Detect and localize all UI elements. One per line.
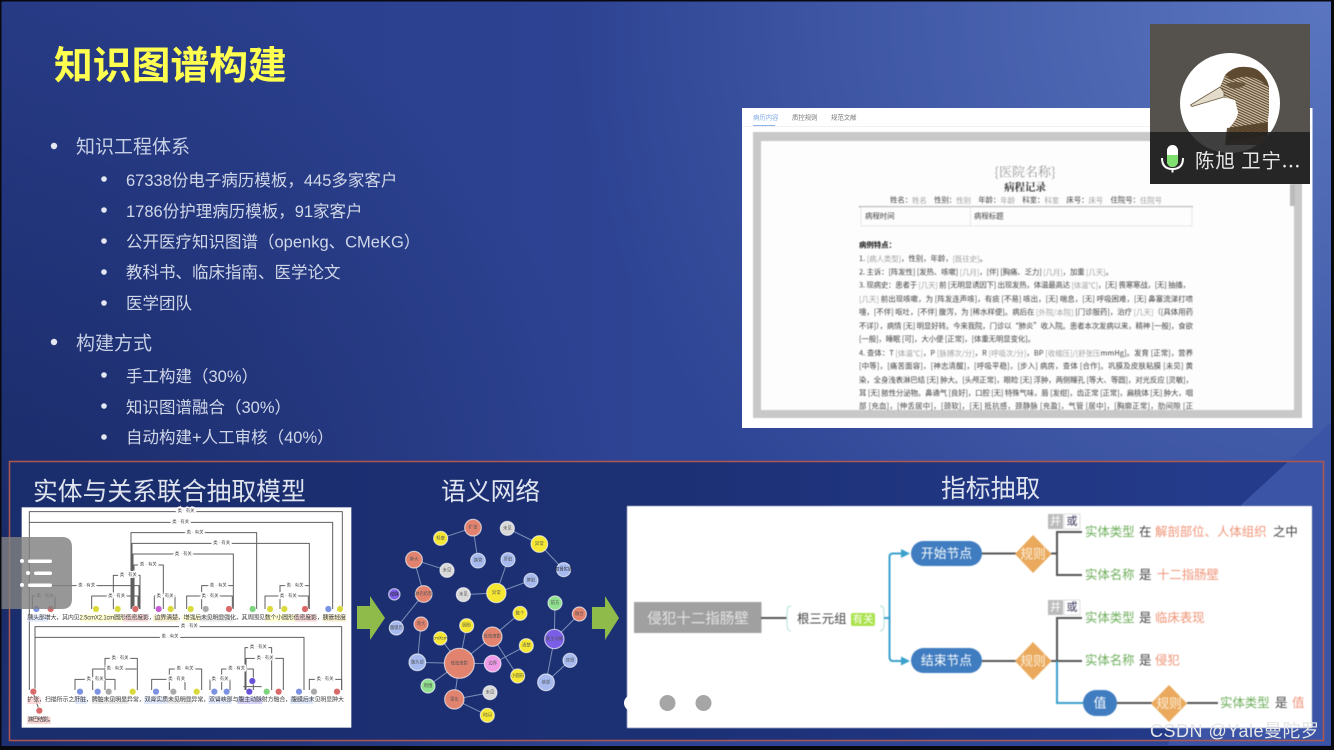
network node labels: 时间 <box>483 711 492 718</box>
rule rows: 解剖部位、人体组织 <box>1155 524 1267 539</box>
chart: semantic network <box>389 519 586 722</box>
network node labels: 圆形 <box>462 622 472 629</box>
arc labels <box>37 507 334 682</box>
bullet list: 公开医疗知识图谱（openkg、CMeKG） <box>126 232 420 252</box>
arc labels: 类 · 有关 <box>181 622 198 629</box>
and/or toggle 1 <box>1048 514 1080 529</box>
bullet list <box>51 136 420 447</box>
network node labels: 轻度 <box>436 534 446 541</box>
document page: [一般]，睡眠 [可]，大小便 [正常]，[体重无明显变化]。 <box>859 334 1035 344</box>
network node labels: 腹主动脉 <box>546 635 564 642</box>
arc labels: 类 · 有关 <box>210 581 227 588</box>
carousel dots <box>624 695 712 711</box>
network node labels: 小圆形 <box>511 672 525 679</box>
token nodes row 1 <box>33 606 343 612</box>
arc labels: 类 · 有关 <box>37 592 54 599</box>
rule rows: 实体名称 <box>1085 652 1135 668</box>
token nodes row 2 <box>30 678 340 714</box>
sentence text: 扩张，扫描所示之肝脏，脾脏未见明显异常，双肾实质未见明显异常，双肾峡部与腹主动脉射方融合，腹膜后未见明显肿大 <box>27 696 344 704</box>
start node: 开始节点 <box>921 546 972 561</box>
rule rows: 实体名称 <box>1085 567 1135 582</box>
network node labels: 未见 <box>503 524 512 531</box>
network node labels: 扩张 <box>469 524 478 531</box>
network node labels: 异常 <box>535 540 544 547</box>
network node labels: cmXcm <box>433 635 448 641</box>
arc labels: 类 · 有关 <box>157 592 174 599</box>
document tabs: 规范文献 <box>831 112 857 122</box>
document tabs: 病历内容 <box>753 112 779 122</box>
network node labels: 双肾实质 <box>555 566 573 573</box>
watermark: CSDN @Yale曼陀罗 <box>1150 721 1319 741</box>
rule rows: 值 <box>1292 695 1304 710</box>
root node <box>634 602 762 633</box>
document page: 嚏，[不伴] 呕吐，[不伴] 腹泻，为 [稀水样便]。病后在 [外院/本院] [门诊服药]，治疗 [几天]（[具体用药 <box>859 306 1193 318</box>
network node labels: 双肾 <box>566 656 575 663</box>
and/or toggle 1: 并 <box>1050 514 1061 528</box>
rule diamond 1 <box>1015 535 1052 573</box>
arc labels: 类 · 有关 <box>177 664 194 671</box>
arc labels: 类 · 有关 <box>187 528 204 535</box>
arc labels: 类 · 有关 <box>213 539 231 546</box>
rule rows: 在 <box>1139 525 1151 539</box>
network node labels: 周围 <box>424 683 432 689</box>
arc labels: 类 · 有关 <box>280 592 297 599</box>
panel: bottom models <box>10 422 1331 745</box>
rule rows: 是 <box>1275 696 1287 710</box>
document page: [中等]，[痛苦面容]，[神志清醒]，[呼吸平稳]，[步入] 病房，查体 [合作]。巩膜及皮肤粘膜 [未见] 黄 <box>859 360 1193 372</box>
network node labels <box>390 524 584 718</box>
arc labels: 类 · 有关 <box>250 643 267 650</box>
rule rows: 是 <box>1139 568 1151 582</box>
document page: 部 [充血]，[伸舌居中]，[颈软]，[无] 抵抗感，颈静脉 [充盈]，气管 [居中]，[胸廓正常]，肋间隙 [正 <box>859 400 1194 412</box>
value node <box>1083 690 1117 716</box>
arc labels: 类 · 有关 <box>108 592 126 599</box>
arc labels: 类 · 有关 <box>140 560 157 567</box>
document page: 姓名：姓名 性别：性别 年龄：年龄 科室：科室 床号：床号 住院号：住院号 <box>890 194 1162 206</box>
document page: 染，全身浅表淋巴结 [无] 肿大。[头颅正常]，眼睑 [无] 浮肿，两侧瞳孔 [等大、等圆]，对光反应 [灵敏]， <box>859 374 1193 386</box>
panel: indicator extraction mind map <box>627 506 1312 728</box>
bullet list: 知识图谱融合（30%） <box>126 398 291 417</box>
arc labels: 类 · 有关 <box>107 664 124 671</box>
rule rows: 实体类型 <box>1085 610 1135 625</box>
end node <box>911 648 982 673</box>
document page: 病程时间 <box>865 210 895 222</box>
network node labels: 边界 <box>488 660 498 667</box>
heading: indicator extraction: 指标抽取 <box>941 469 1040 505</box>
document page: 2. 主诉：[阵发性] [发热、咳嗽] [几月]，[伴] [胸痛、乏力] [几月]，加重 [几天]。 <box>859 266 1113 278</box>
and/or toggle 2: 或 <box>1066 600 1078 614</box>
sentence text: 淋巴结影。 <box>27 715 54 723</box>
sentence text <box>27 613 346 723</box>
bullet list: 手工构建（30%） <box>126 367 258 386</box>
relation label <box>797 612 875 626</box>
document page: 1. [病人类型]，性别，年龄，[既往史]。 <box>859 253 987 264</box>
document page: 不详]），病情 [无] 明显好转。今来我院，门诊以“肺炎”收入院。患者本次发病以来，精神 [一般]，食欲 <box>859 320 1194 332</box>
bullet list: 67338份电子病历模板，445多家客户 <box>126 171 397 190</box>
arc labels: 类 · 有关 <box>172 518 190 525</box>
rule rows: 实体类型 <box>1220 695 1270 710</box>
rule rows: 是 <box>1139 611 1151 625</box>
document tabs <box>742 112 1312 127</box>
arc labels: 类 · 有关 <box>257 654 274 661</box>
bullet list: 知识工程体系 <box>76 136 190 158</box>
network node labels: 脾脏 <box>527 576 536 583</box>
network node labels: 肿大 <box>410 556 419 563</box>
network node labels: 未见 <box>459 591 468 598</box>
icon: microphone <box>1162 145 1183 172</box>
network node labels: 数个 <box>516 609 525 616</box>
rule rows <box>1085 524 1304 710</box>
video tile: speaker avatar <box>1150 24 1310 184</box>
network node labels: 低密度影 <box>451 659 469 666</box>
arc labels: 类 · 有关 <box>112 654 129 661</box>
and/or toggle 2: 并 <box>1050 600 1061 614</box>
rule rows: 侵犯 <box>1155 652 1180 668</box>
arc labels: 类 · 有关 <box>87 675 104 682</box>
document page: 耳 [无] 脓性分泌物。鼻通气 [良好]，口腔 [无] 特殊气味，唇 [发绀]，齿正常 [正常]，扁桃体 [无] 肿大，咽 <box>859 388 1193 398</box>
network node labels: 前方 <box>551 599 560 606</box>
and/or toggle 2 <box>1048 600 1080 615</box>
arc labels: 类 · 有关 <box>287 581 304 588</box>
heading: semantic network: 语义网络 <box>441 472 540 508</box>
document page: 3. 现病史：患者于 [几天] 前 [无明显诱因下] 出现发热，体温最高达 [体温℃]，[无] 畏寒寒战，[无] 抽搐， <box>859 280 1190 290</box>
rule rows: 十二指肠壁 <box>1157 567 1219 582</box>
network node labels: 异常 <box>492 589 501 596</box>
relation label: 有关 <box>852 612 874 626</box>
arrow: left green <box>357 596 385 640</box>
network node labels: 未见 <box>443 566 452 573</box>
icon: duck <box>1190 67 1269 145</box>
document page: 病程标题 <box>974 210 1004 222</box>
network node labels: 增大 <box>417 620 426 627</box>
connector lines <box>761 532 1218 703</box>
rule diamond 3: 规则 <box>1156 696 1182 711</box>
arc labels: 类 · 有关 <box>228 664 246 671</box>
network node labels: 动脉 <box>390 590 399 597</box>
document page: {医院名称} <box>994 162 1056 180</box>
relation label: 根三元组 <box>797 612 847 626</box>
arc labels: 类 · 有关 <box>162 632 179 639</box>
root node: 侵犯十二指肠壁 <box>647 608 749 628</box>
title: 知识图谱构建 <box>54 35 287 91</box>
arc labels: 类 · 有关 <box>202 592 219 599</box>
document tabs: 质控规则 <box>792 112 818 122</box>
arrow: right green <box>592 596 619 640</box>
network node labels: 未见 <box>486 689 495 696</box>
rule diamond 2: 规则 <box>1020 654 1046 668</box>
network node labels: 低密度影 <box>484 633 502 640</box>
network node labels: 峡部 <box>542 678 551 685</box>
document page: 病例特点： <box>859 240 896 250</box>
rule rows: 临床表现 <box>1155 611 1205 625</box>
network node labels: 肝脏 <box>504 556 513 563</box>
and/or toggle 1: 或 <box>1066 514 1078 528</box>
document page: 4. 查体：T [体温℃]，P [脉搏次/分]，R [呼吸次/分]，BP [收缩压]/[舒张压mmHg]。发育 [正常]，营养 <box>859 348 1194 358</box>
network node labels: 胰头部 <box>411 658 424 665</box>
arc labels: 类 · 有关 <box>317 675 334 682</box>
rule rows: 实体类型 <box>1085 524 1135 539</box>
chart: dependency parse <box>22 507 351 728</box>
speaker name: 陈旭 卫宁... <box>1195 144 1300 174</box>
network node labels: 淋巴结影 <box>415 590 433 597</box>
rule diamond 1: 规则 <box>1020 546 1046 562</box>
start node <box>911 541 982 566</box>
document page <box>753 132 1302 418</box>
arc labels: 类 · 有关 <box>212 675 229 682</box>
network node labels: 胰管 <box>474 557 483 564</box>
rule diamond 3 <box>1151 685 1187 722</box>
network nodes <box>389 519 586 722</box>
document page: [几天] 前出现咳嗽，为 [阵发连声咳]，有痰 [不易] 咳出，[无] 喘息，[无] 呼吸困难，[无] 鼻塞流涕打喷 <box>859 294 1194 304</box>
network node labels: 强化 <box>450 695 459 702</box>
rule rows: 之中 <box>1273 524 1298 539</box>
bullet list: 构建方式 <box>76 332 152 354</box>
network node labels: 腹膜后 <box>390 624 403 631</box>
network edges <box>396 528 579 715</box>
arc labels: 类 · 有关 <box>178 507 195 514</box>
heading: entity relation model: 实体与关系联合抽取模型 <box>33 472 306 508</box>
end node: 结束节点 <box>921 653 972 668</box>
network node labels: 融合 <box>575 610 584 617</box>
rule diamond 2 <box>1015 642 1052 680</box>
bullet list: 教科书、临床指南、医学论文 <box>126 263 340 282</box>
bullet list: 医学团队 <box>126 294 192 313</box>
panel: medical record document <box>742 108 1312 428</box>
arc labels: 类 · 有关 <box>120 571 137 578</box>
sentence text: 胰头部增大，其内见2.5cmX2.1cm圆形低密度影，边界清楚，增强后未见明显强化，其周围见数个小圆形低密度影，胰管轻度 <box>27 613 346 621</box>
document page: 病程记录 <box>1004 180 1046 194</box>
token highlights <box>27 614 346 724</box>
arc labels: 类 · 有关 <box>175 550 192 557</box>
arrowheads <box>901 549 910 666</box>
arc labels: 类 · 有关 <box>168 675 186 682</box>
value node: 值 <box>1094 696 1107 710</box>
arc labels: 类 · 有关 <box>78 581 96 588</box>
bullet list: 1786份护理病历模板，91家客户 <box>126 202 363 221</box>
menu button <box>0 537 72 609</box>
bullet list: 自动构建+人工审核（40%） <box>126 428 334 447</box>
rule rows: 是 <box>1139 654 1151 668</box>
network node labels: 清楚 <box>522 642 531 649</box>
